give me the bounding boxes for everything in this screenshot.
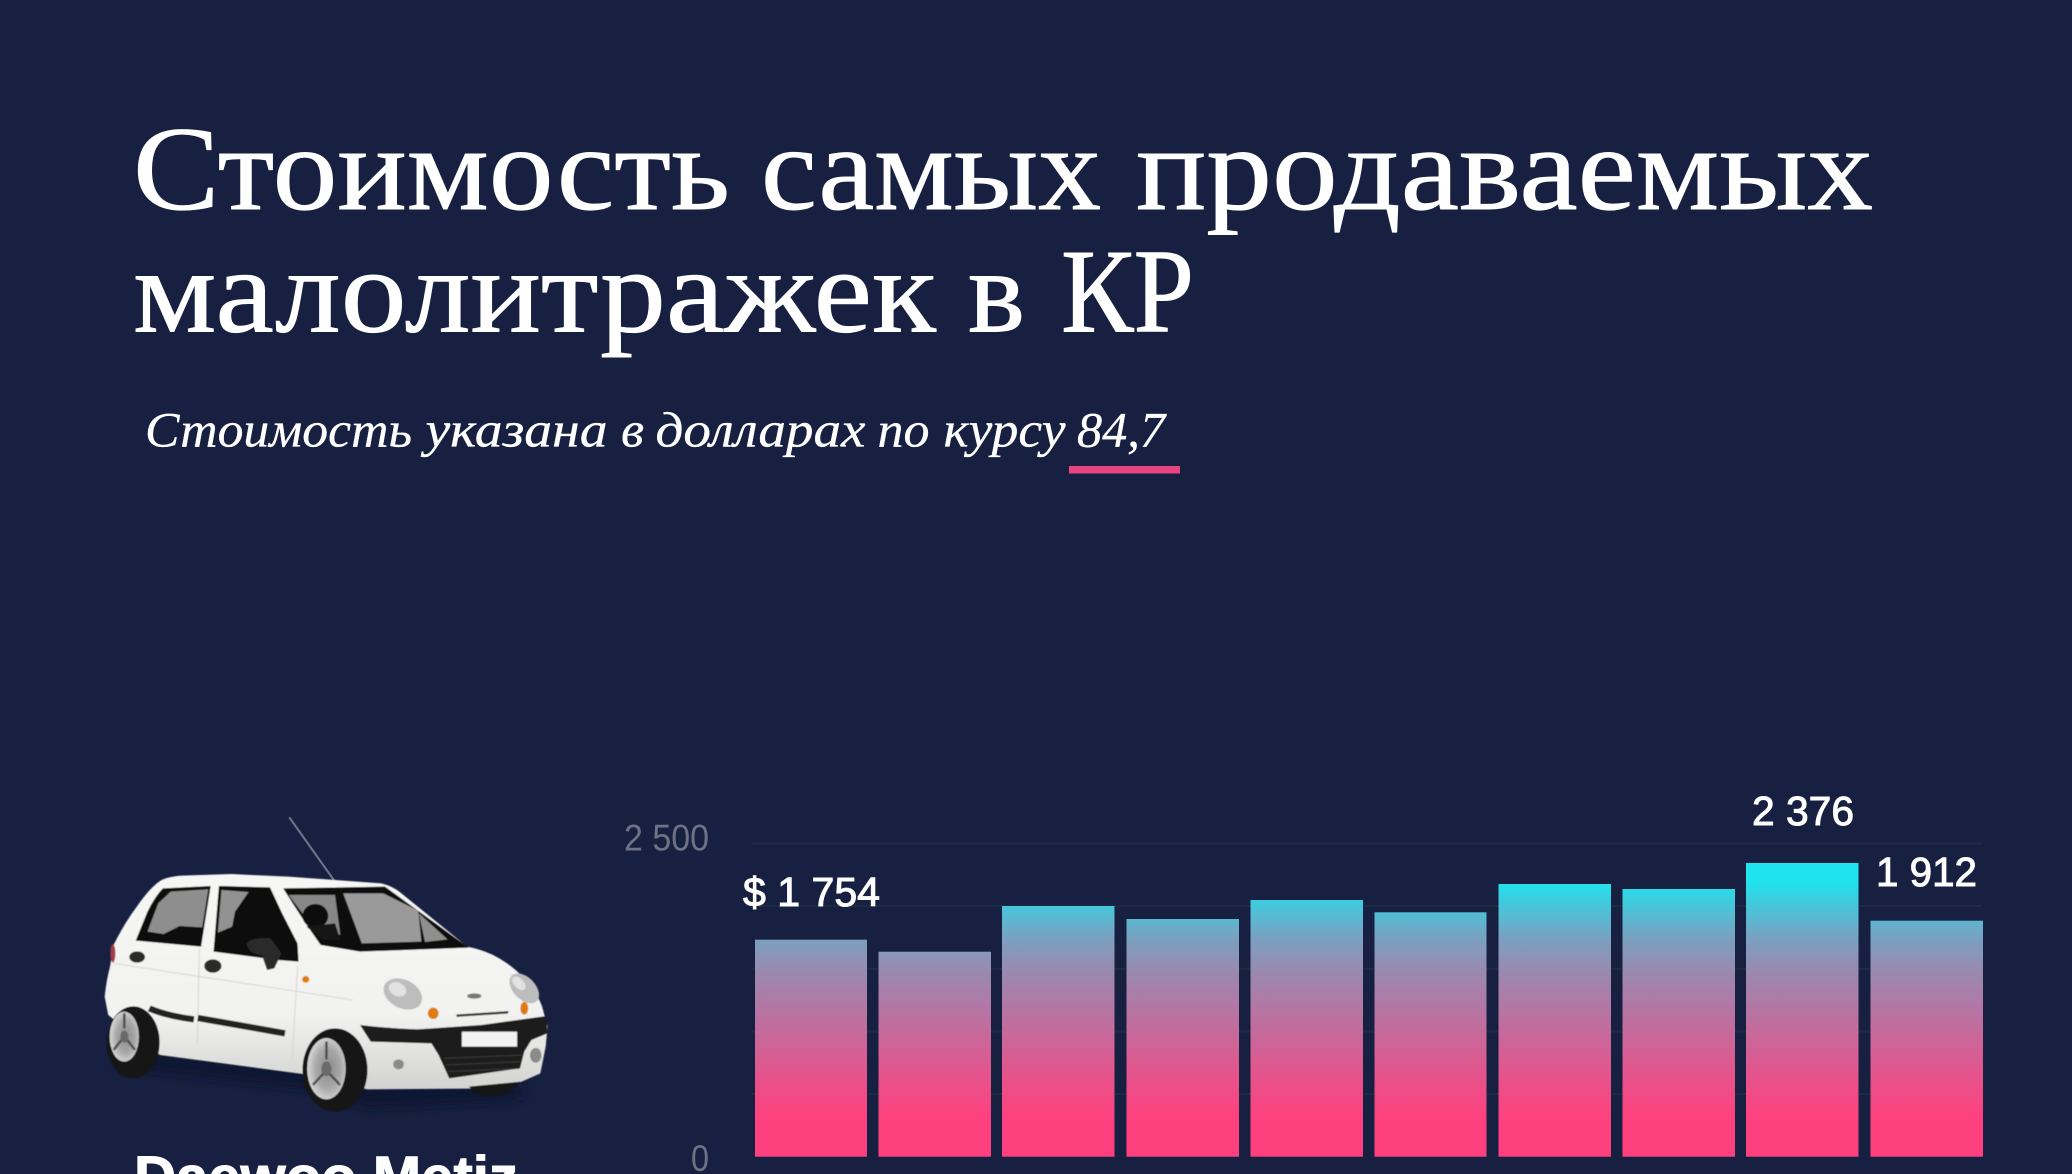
value labels: [743, 788, 1977, 915]
car tyres: [107, 1006, 521, 1112]
badge: [467, 993, 481, 999]
title: [133, 102, 1873, 358]
headlight highlights: [386, 974, 528, 1000]
door handles: [129, 951, 221, 973]
subtitle: указана: [420, 402, 608, 458]
turn indicators: [302, 976, 528, 1019]
subtitle: долларах: [656, 402, 866, 458]
subtitle: 84,7: [1077, 402, 1167, 458]
bar chart: [624, 788, 1983, 1174]
subtitle underline accent: [1069, 466, 1180, 474]
gridlines: [752, 844, 1982, 1094]
upper grille slit: [456, 1012, 508, 1016]
wheel hubs: [120, 1031, 331, 1076]
subtitle: [145, 402, 1167, 458]
windshield: [283, 887, 469, 952]
bars: [755, 863, 1983, 1157]
rim spokes: [114, 1013, 340, 1085]
icon: white Daewoo Matiz car: [105, 817, 547, 1112]
title: Стоимость: [133, 102, 730, 235]
title: самых: [761, 102, 1101, 235]
number plate: [462, 1032, 517, 1047]
subtitle: в: [621, 402, 644, 458]
fog lamps: [393, 1048, 541, 1069]
headlights: [377, 968, 545, 1016]
front door window: [214, 886, 299, 962]
mirror: [246, 938, 281, 970]
rear side window: [136, 886, 211, 947]
subtitle: Стоимость: [145, 402, 412, 458]
title: малолитражек: [133, 224, 937, 358]
title: продаваемых: [1136, 102, 1873, 235]
y axis labels: [624, 818, 709, 1174]
front bumper black band: [360, 1016, 547, 1078]
lower intake grille: [444, 1055, 522, 1072]
wheel rims: [110, 1012, 346, 1099]
car body: [105, 874, 547, 1089]
title: в: [968, 224, 1025, 358]
car ground shadow: [114, 1053, 524, 1108]
title: КР: [1061, 224, 1194, 358]
y axis labels: 2 500: [624, 818, 709, 858]
car antenna: [289, 817, 335, 882]
side mouldings: [149, 1008, 285, 1033]
subtitle: курсу: [944, 402, 1066, 458]
door seams: [114, 948, 353, 1060]
value labels: $ 1 754: [743, 869, 880, 915]
value labels: 1 912: [1876, 849, 1977, 895]
rear lamp: [110, 944, 115, 963]
value labels: 2 376: [1752, 788, 1854, 834]
subtitle: по: [878, 402, 930, 458]
